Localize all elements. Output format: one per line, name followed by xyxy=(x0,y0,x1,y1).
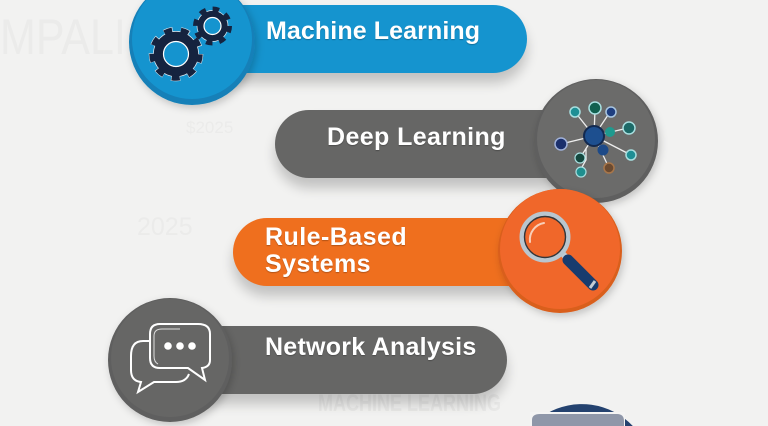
network analysis pill xyxy=(170,326,507,394)
panel: machine learning xyxy=(236,5,532,88)
watermark: lower heading: MACHINE LEARNING xyxy=(318,390,501,417)
watermark: large year: 2025 xyxy=(137,213,193,241)
panel: deep learning xyxy=(270,110,556,194)
machine learning label: Machine Learning xyxy=(266,17,480,45)
icon: partial navy circle at bottom xyxy=(530,404,633,426)
deep learning label: Deep Learning xyxy=(327,123,506,151)
icon: chat bubbles in grey circle xyxy=(108,298,232,422)
watermark: background text: MPALI xyxy=(0,9,126,65)
icon: magnifying glass in orange circle xyxy=(498,189,622,313)
network analysis label: Network Analysis xyxy=(265,333,476,361)
watermark: small year: $2025 xyxy=(186,118,233,137)
rule-based pill xyxy=(233,218,533,286)
rule-based label: Rule-Based xyxy=(265,223,407,251)
panel: network analysis xyxy=(209,326,512,410)
panel: rule-based systems xyxy=(228,218,523,302)
machine learning pill xyxy=(190,5,527,73)
rule-based label: Systems xyxy=(265,250,371,278)
icon: gears in blue circle xyxy=(129,0,255,105)
deep learning pill xyxy=(275,110,575,178)
rule-based label xyxy=(265,223,407,278)
icon: neural network in grey circle xyxy=(534,79,658,203)
